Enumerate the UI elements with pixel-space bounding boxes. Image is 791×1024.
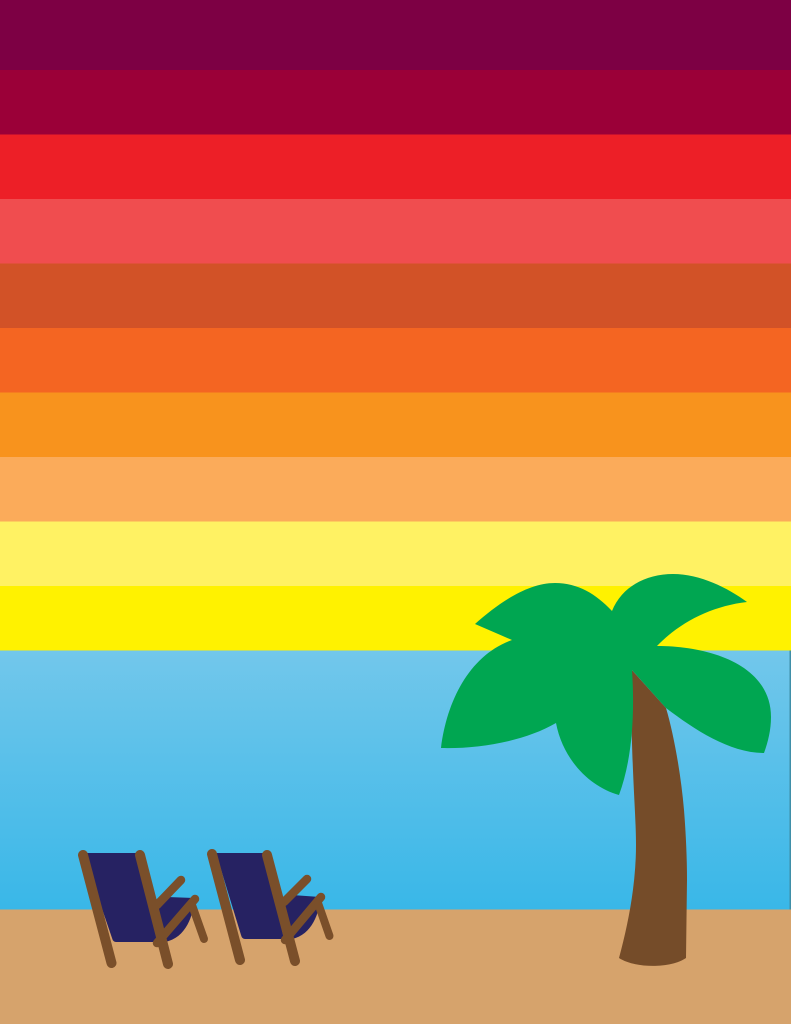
chair frame	[212, 854, 330, 961]
chair seat	[83, 853, 194, 942]
ocean	[0, 650, 791, 910]
deck chair: right	[212, 853, 330, 961]
palm trunk	[619, 669, 687, 966]
chair frame	[83, 855, 204, 964]
chair seat	[216, 853, 320, 939]
deck chair: left	[83, 853, 204, 964]
sunset sky stripes	[0, 0, 791, 650]
sand	[0, 910, 791, 1024]
palm tree	[441, 574, 771, 966]
ocean right edge line	[790, 650, 791, 910]
palm fronds	[441, 574, 771, 795]
